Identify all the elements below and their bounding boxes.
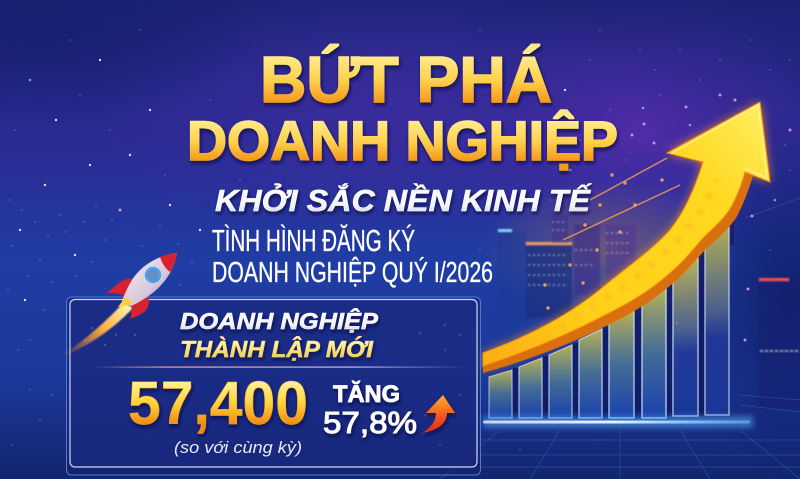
window [146,268,160,282]
report heading: TÌNH HÌNH ĐĂNG KÝ [212,223,415,258]
value: 57,400: 57,400 [128,369,308,437]
base glow line [483,416,753,428]
arrow body and head [483,102,770,366]
arrow texture [495,180,718,356]
report heading: DOANH NGHIỆP QUÝ I/2026 [212,256,493,289]
divider [90,366,468,368]
growth label: TĂNG [333,380,400,408]
bar gaps shadow [513,215,734,418]
rising arrow [483,102,770,373]
icon: up arrow [422,395,455,433]
title: BỨT PHÁ [260,43,552,116]
title: DOANH NGHIỆP [187,109,618,172]
growth label [323,380,417,440]
bar chart [489,223,729,418]
report heading [212,223,493,289]
title [187,43,618,172]
comparison note: (so với cùng kỳ) [174,438,302,457]
panel heading [180,307,379,362]
bar 1 [489,370,512,418]
bar 5 [609,310,634,418]
subtitle: KHỞI SẮC NỀN KINH TẾ [215,182,592,218]
icon: rocket with flame [60,253,177,357]
flame trail [60,302,133,357]
nose cone [160,253,177,272]
panel: new enterprises [66,297,480,475]
arrow glow [483,102,770,370]
panel heading: DOANH NGHIỆP [180,307,379,334]
arrow underside [483,168,753,373]
trend lines behind arrow [563,158,680,240]
bar 2 [519,358,542,418]
bar 4 [579,329,602,418]
nozzle flame [118,296,134,307]
rocket body [122,253,177,306]
city skyline [497,215,800,408]
growth label: 57,8% [323,405,417,440]
bar 6 [642,287,666,418]
panel heading: THÀNH LẬP MỚI [180,335,374,362]
bar 8 [705,223,729,415]
panel background [66,297,480,475]
floor grid [440,198,800,479]
right fin [130,297,149,319]
bar 3 [549,345,572,418]
bar 7 [673,258,698,416]
arrow highlight [672,105,767,178]
left fin [107,279,137,296]
